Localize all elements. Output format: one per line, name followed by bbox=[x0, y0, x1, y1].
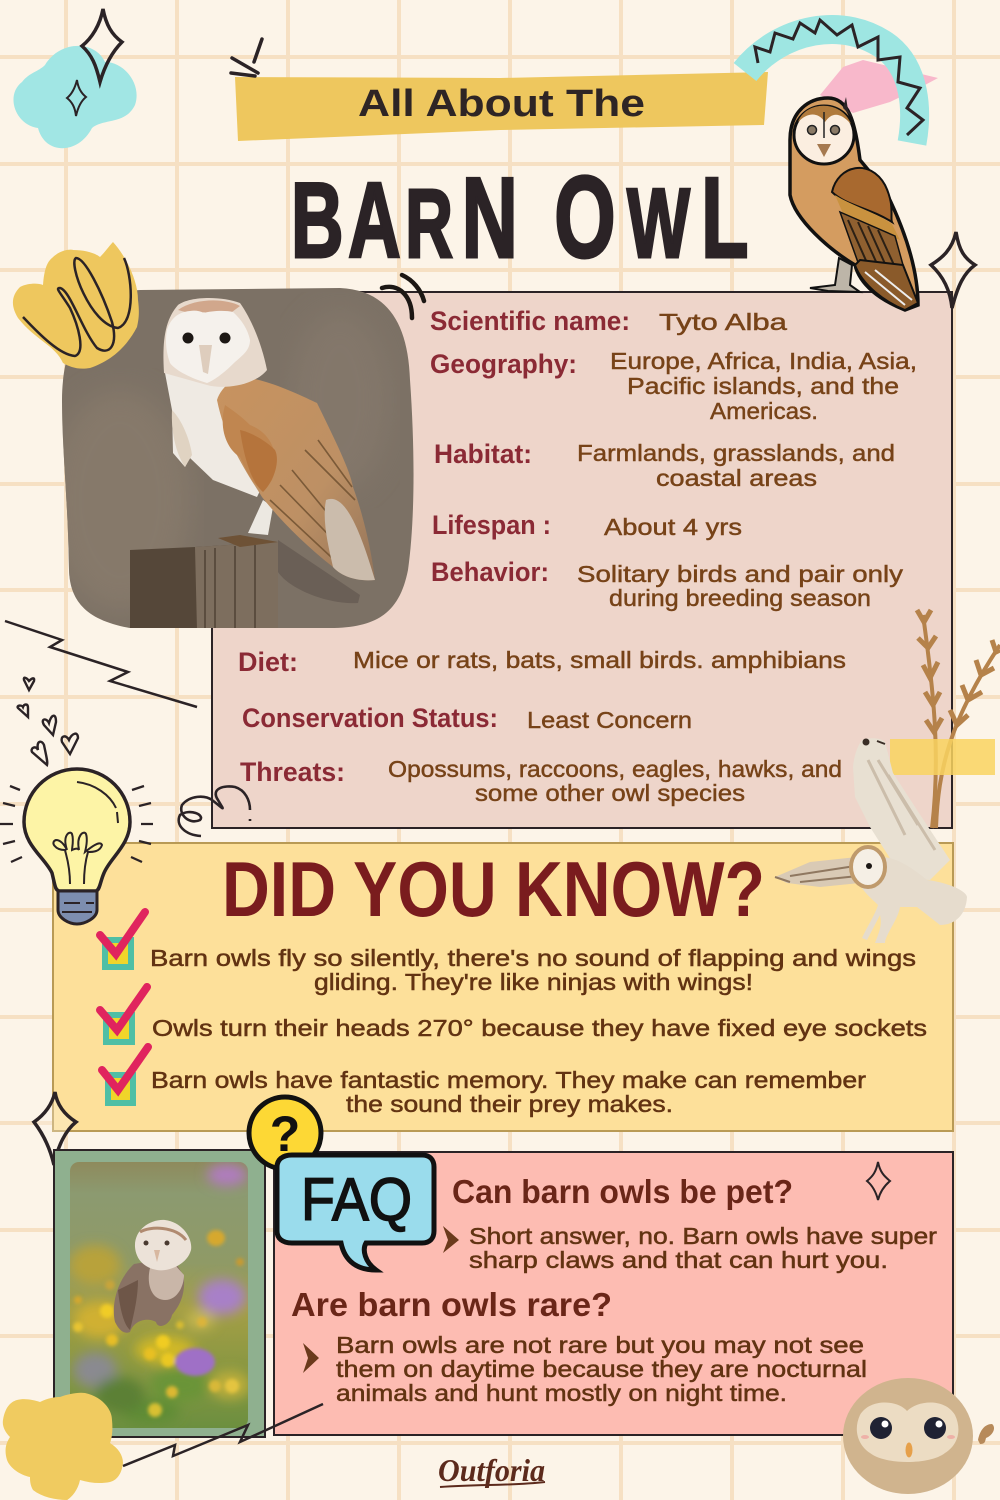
fact 3 bbox=[151, 1067, 866, 1117]
decoration: spiral scribble bbox=[179, 786, 250, 836]
title: barn owl: A bbox=[348, 161, 401, 280]
fact: lifespan: About 4 yrs bbox=[604, 514, 742, 540]
answer: rare: Barn owls are not rare but you may not see bbox=[336, 1332, 864, 1358]
title: barn owl: W bbox=[627, 168, 691, 278]
fact: diet: Diet: bbox=[238, 647, 298, 677]
panel: did you know bbox=[53, 843, 953, 1131]
illustration: perched cartoon owl bbox=[790, 97, 918, 310]
arrow marker 1 bbox=[443, 1226, 459, 1253]
decoration: right sparkle bbox=[931, 232, 975, 308]
decoration: translucent yellow tape bbox=[890, 739, 995, 775]
heading: did you know: DID YOU KNOW? bbox=[222, 845, 765, 933]
fact: geography: Pacific islands, and the bbox=[627, 373, 899, 399]
fact: lifespan bbox=[432, 510, 742, 540]
decoration: small arcs at panel corner bbox=[382, 275, 424, 318]
icon: faq speech bubble: FAQ bbox=[301, 1166, 412, 1233]
panel: facts bbox=[212, 292, 952, 828]
fact: lifespan: Lifespan : bbox=[432, 510, 551, 540]
icon: light bulb bbox=[0, 769, 153, 924]
title: barn owl: R bbox=[405, 169, 453, 278]
icon: question badge: ? bbox=[270, 1106, 300, 1162]
fact: diet: Mice or rats, bats, small birds. amphibians bbox=[353, 647, 846, 673]
panel: faq bbox=[274, 1152, 953, 1435]
illustration: flying barn owl bbox=[775, 738, 967, 943]
fence post bbox=[130, 535, 278, 630]
fact: threats: some other owl species bbox=[475, 780, 745, 806]
fact 1: Barn owls fly so silently, there's no sound of flapping and wings bbox=[150, 945, 916, 971]
icon: hearts bbox=[18, 678, 78, 765]
fact: scientific name: Tyto Alba bbox=[659, 309, 787, 335]
icon: checkmark 1 bbox=[100, 912, 145, 967]
decoration: yellow blob bottom left bbox=[3, 1393, 123, 1500]
title: barn owl: B bbox=[291, 161, 344, 280]
icon: question badge bbox=[249, 1097, 321, 1169]
decoration: teal cloud with sparkles bbox=[13, 9, 137, 148]
fact: scientific name: Scientific name: bbox=[430, 306, 630, 336]
fact: behavior: during breeding season bbox=[609, 585, 871, 611]
decoration: lower lightning squiggle bbox=[123, 1404, 323, 1466]
banner: all about the bbox=[231, 39, 768, 141]
title: barn owl: L bbox=[701, 154, 748, 282]
decoration: teal and pink arch with zigzag bbox=[745, 20, 938, 143]
fact 3: Barn owls have fantastic memory. They make can remember bbox=[151, 1067, 866, 1093]
fact: conservation status: Least Concern bbox=[527, 707, 692, 733]
question: rare: Are barn owls rare? bbox=[291, 1286, 612, 1323]
logo: outforia: Outforia bbox=[438, 1452, 545, 1488]
fact: threats: Threats: bbox=[240, 757, 345, 787]
fact: threats bbox=[240, 756, 842, 806]
question: pet: Can barn owls be pet? bbox=[452, 1173, 793, 1210]
photo panel: owl in flowers bbox=[54, 1150, 265, 1437]
photo: barn owl on post bbox=[50, 285, 420, 630]
title: barn owl: O bbox=[554, 153, 616, 283]
fact 2: Owls turn their heads 270° because they have fixed eye sockets bbox=[152, 1015, 927, 1041]
fact 1: gliding. They're like ninjas with wings! bbox=[314, 969, 753, 995]
fact: threats: Opossums, raccoons, eagles, hawks, and bbox=[388, 756, 842, 782]
answer: pet bbox=[469, 1223, 937, 1273]
fact: diet bbox=[238, 647, 846, 677]
illustration: round cartoon owl bbox=[843, 1378, 994, 1494]
icon: faq speech bubble bbox=[277, 1155, 434, 1270]
decoration: yellow flower with scribble bbox=[13, 242, 139, 369]
fact: behavior bbox=[431, 557, 904, 611]
banner text: All About The bbox=[358, 83, 645, 125]
illustration: lavender sprigs bbox=[917, 610, 1000, 828]
arrow marker 2 bbox=[303, 1343, 319, 1373]
fact: geography: Americas. bbox=[710, 398, 818, 424]
fact: geography bbox=[430, 348, 917, 424]
answer: rare: them on daytime because they are nocturnal bbox=[336, 1356, 867, 1382]
answer: rare bbox=[336, 1332, 867, 1406]
fact: behavior: Behavior: bbox=[431, 557, 549, 587]
fact: behavior: Solitary birds and pair only bbox=[577, 561, 904, 587]
fact: geography: Europe, Africa, India, Asia, bbox=[610, 348, 917, 374]
fact: scientific name bbox=[430, 306, 787, 336]
decoration: left sparkle bbox=[34, 1092, 76, 1165]
fact: habitat: Farmlands, grasslands, and bbox=[577, 440, 895, 466]
decoration: lightning squiggle bbox=[5, 621, 197, 707]
icon: checkmark 2 bbox=[100, 987, 147, 1042]
answer: rare: animals and hunt mostly on night time. bbox=[336, 1380, 787, 1406]
fact: conservation status: Conservation Status: bbox=[242, 703, 498, 733]
answer: pet: sharp claws and that can hurt you. bbox=[469, 1247, 888, 1273]
fact 3: the sound their prey makes. bbox=[346, 1091, 673, 1117]
owl in flowers bbox=[114, 1220, 191, 1333]
fact: habitat: Habitat: bbox=[434, 439, 532, 469]
fact 1 bbox=[150, 945, 916, 995]
fact: geography: Geography: bbox=[430, 349, 577, 379]
fact: habitat: coastal areas bbox=[656, 465, 817, 491]
fact: conservation status bbox=[242, 703, 692, 733]
answer: pet: Short answer, no. Barn owls have super bbox=[469, 1223, 937, 1249]
title: barn owl: N bbox=[462, 154, 518, 282]
fact: habitat bbox=[434, 439, 895, 491]
decoration: faq sparkle bbox=[867, 1162, 890, 1200]
icon: checkmark 3 bbox=[102, 1047, 148, 1103]
